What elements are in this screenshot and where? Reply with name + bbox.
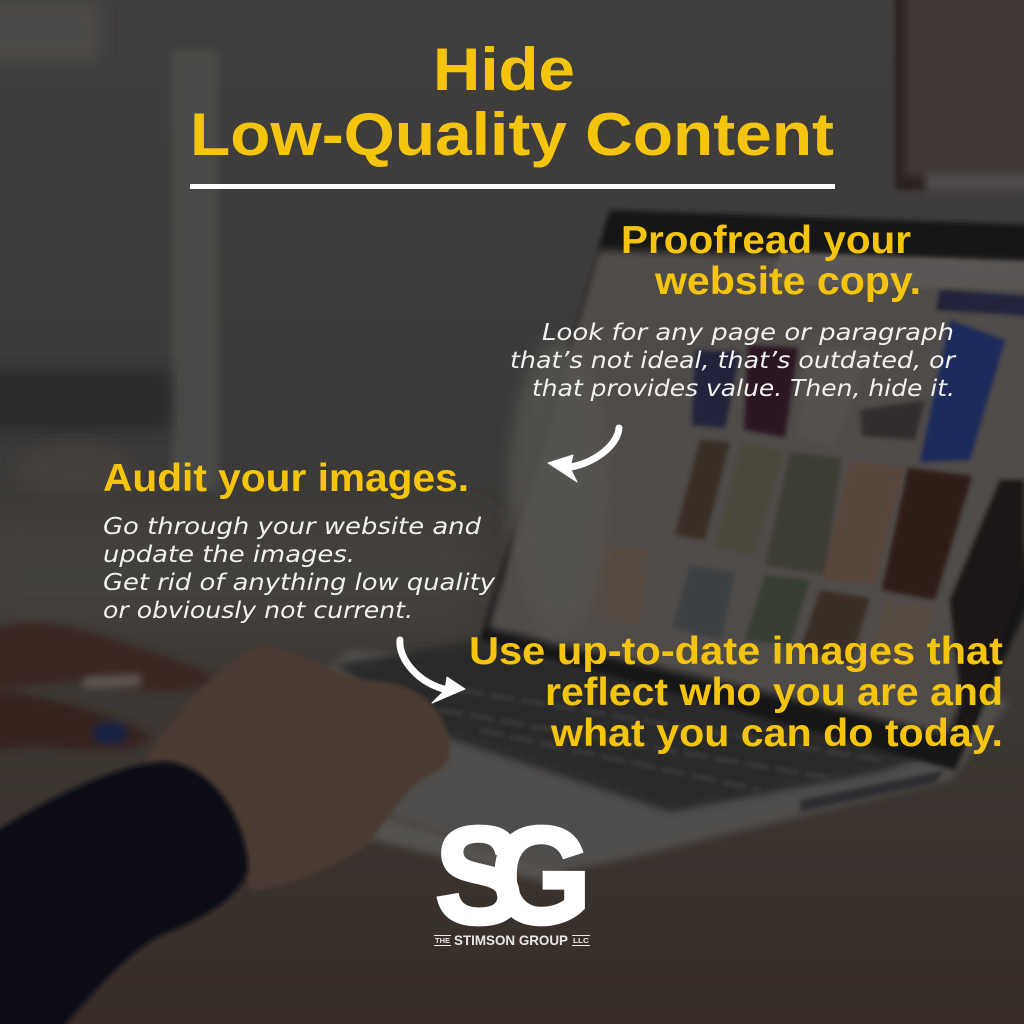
arrow: curved pointing to audit block — [548, 428, 619, 482]
body: proofread: Look for any page or paragraph — [542, 320, 954, 346]
title: Low-Quality Content — [190, 101, 834, 168]
body: audit: Get rid of anything low quality — [103, 570, 495, 596]
background: blurred room shapes — [0, 0, 1024, 630]
left hand — [0, 623, 215, 750]
title underline — [190, 184, 835, 189]
heading: audit: Audit your images. — [103, 457, 469, 500]
laptop base and keyboard — [300, 640, 1010, 888]
title: Hide — [433, 36, 575, 103]
arrow: curved pointing to up-to-date heading — [400, 640, 465, 703]
logo wordmark: STIMSON GROUP — [454, 932, 568, 948]
heading: proofread: website copy. — [654, 260, 921, 303]
block: proofread your website copy — [510, 219, 957, 402]
title — [190, 36, 834, 168]
heading: use up-to-date images: what you can do today. — [550, 712, 1003, 755]
photo grid — [590, 320, 1024, 740]
logo wordmark: LLC — [573, 938, 589, 945]
body: audit: or obviously not current. — [103, 598, 413, 624]
block: audit your images — [103, 457, 495, 624]
logo letters SG: G — [491, 799, 591, 953]
laptop screen — [480, 210, 1024, 770]
heading: use up-to-date images: Use up-to-date images that — [469, 630, 1003, 673]
body: proofread: that provides value. Then, hide it. — [532, 376, 955, 402]
logo: The Stimson Group — [434, 799, 591, 953]
logo letters SG — [435, 799, 591, 953]
logo wordmark: THE — [435, 938, 450, 945]
body: proofread — [510, 320, 957, 402]
right hand — [145, 645, 450, 890]
heading: use up-to-date images: reflect who you are and — [545, 671, 1003, 714]
heading: proofread: Proofread your — [621, 219, 911, 262]
dark sleeve — [0, 762, 248, 1024]
body: audit: Go through your website and — [103, 514, 481, 540]
body: audit: update the images. — [103, 542, 355, 568]
logo letters SG: S — [435, 799, 523, 953]
body: proofread: that’s not ideal, that’s outdated, or — [510, 348, 957, 374]
heading: proofread — [621, 219, 921, 303]
heading: use up-to-date images — [469, 630, 1003, 755]
body: audit — [103, 514, 495, 624]
